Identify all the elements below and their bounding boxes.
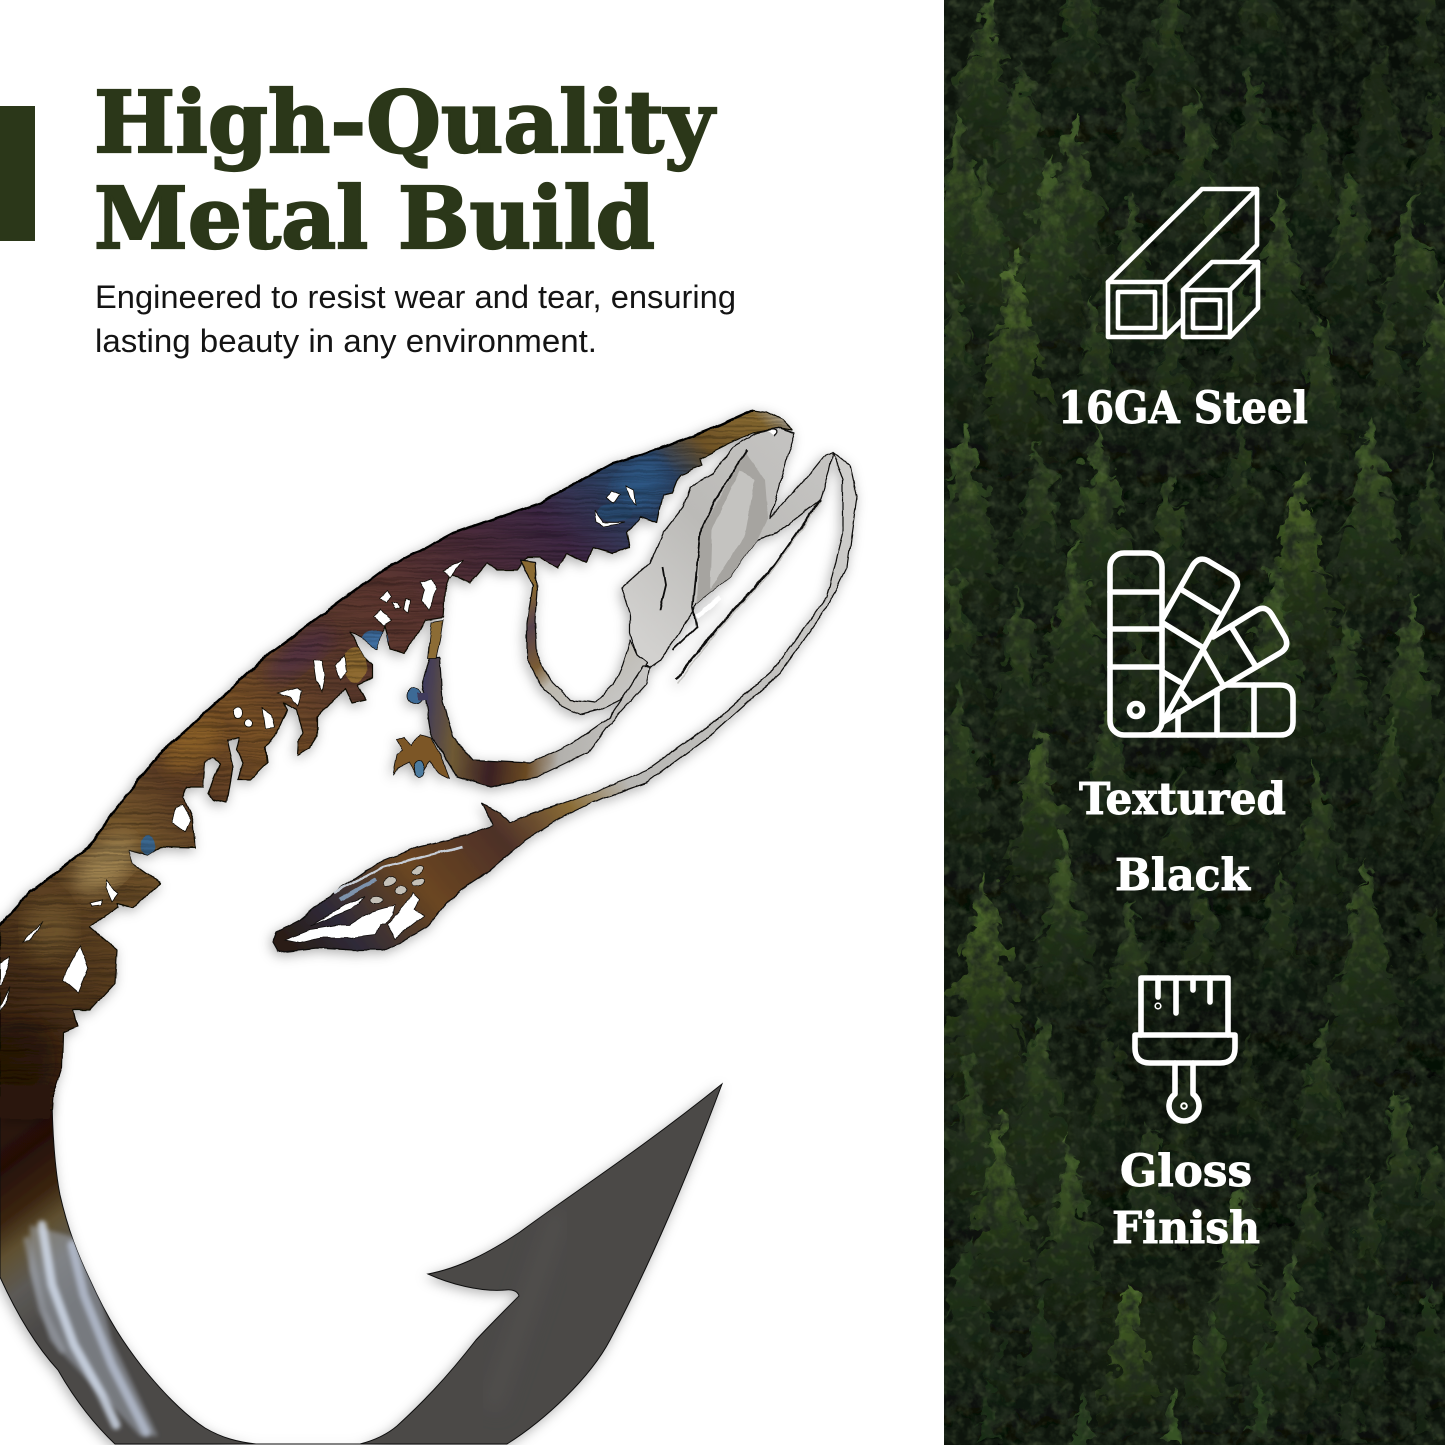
silver head plate [622,428,833,667]
label: Gloss Finish [1112,1146,1260,1254]
fin cut-outs [285,892,425,943]
gill connector stem [428,620,443,658]
forest trees [908,0,1445,1444]
inner jaw line [675,500,820,680]
fish hook tail [0,1084,722,1444]
gill curve [423,657,650,787]
label: Textured Black: Black [1115,850,1251,901]
panel: forest photo background [908,0,1445,1445]
label: Textured Black [1079,774,1286,901]
body cut-outs [0,486,636,1012]
lower jaw and pectoral fin [273,452,857,952]
accent bar [0,106,35,241]
label: Gloss Finish: Finish [1112,1203,1260,1254]
fin streak [333,847,463,893]
forest light and shadow patches [950,0,1445,1430]
title: High-Quality [94,73,717,173]
title [94,73,717,269]
label: Textured Black: Textured [1079,774,1286,825]
metal salmon artwork [0,405,857,1119]
dark back edge [0,410,753,925]
fish body [0,405,800,1119]
label: 16GA Steel: 16GA Steel [1058,383,1308,434]
fin spots [371,864,426,904]
preopercle curve [521,560,647,715]
description text: lasting beauty in any environment. [95,323,597,359]
description text [95,279,736,359]
label: Gloss Finish: Gloss [1120,1146,1252,1197]
title: Metal Build [94,169,655,269]
mottled lobes [393,688,450,778]
description text: Engineered to resist wear and tear, ensuring [95,279,736,315]
icon: paint brush [1135,978,1235,1121]
icon: steel tubes [1108,189,1258,337]
panel: white background [0,0,944,1445]
icon: colour swatch fan [1110,553,1293,735]
